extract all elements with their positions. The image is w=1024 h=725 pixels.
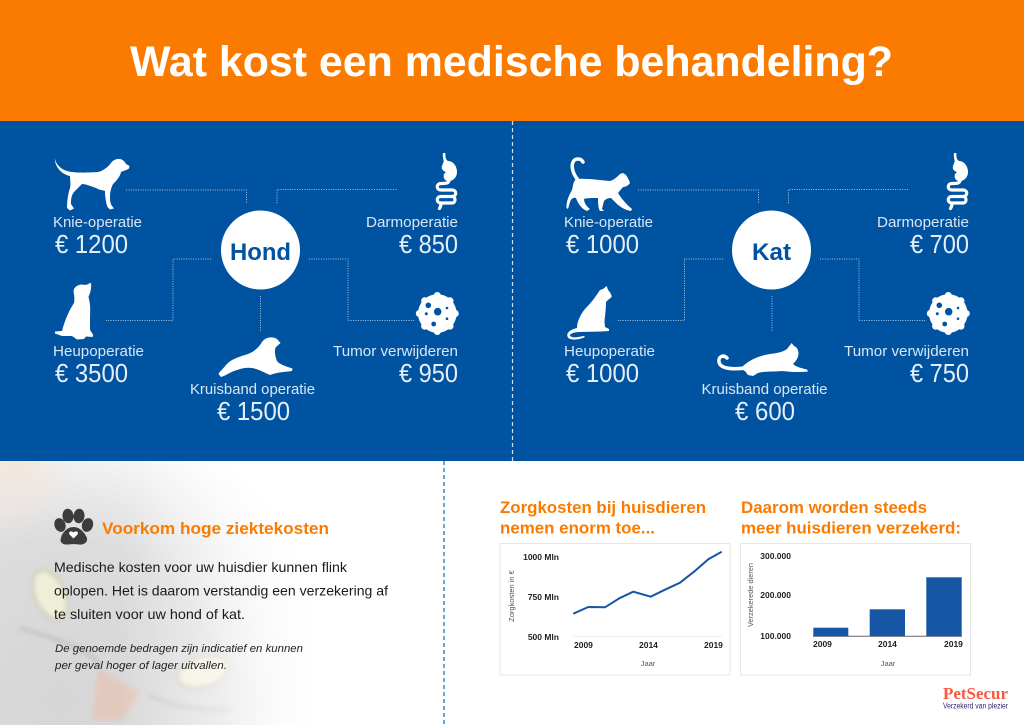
icon: lying dog	[218, 337, 292, 377]
hub: kat: Kat	[752, 239, 791, 266]
body text: oplopen. Het is daarom verstandig een verzekering af	[54, 582, 388, 598]
item: knie-operatie: € 1200	[55, 229, 128, 259]
heading	[741, 498, 961, 538]
icon: intestines	[437, 153, 457, 208]
heading: nemen enorm toe...	[500, 518, 655, 538]
heading: Daarom worden steeds	[741, 498, 927, 517]
background photo: cat face	[0, 461, 256, 725]
heading: Zorgkosten bij huisdieren	[500, 498, 706, 517]
item: kat heupoperatie: € 1000	[566, 358, 639, 388]
logo: PetSecur: Verzekerd van plezier	[943, 702, 1008, 710]
item: kat darmoperatie: € 700	[910, 229, 969, 259]
icon: tumor cell	[927, 292, 970, 335]
item: kat heupoperatie	[564, 343, 655, 388]
bar chart	[740, 544, 970, 675]
item: kat knie-operatie	[564, 214, 653, 259]
line chart: 1000 Mln	[523, 552, 559, 562]
disclaimer	[54, 643, 303, 672]
bar chart: 2009	[813, 639, 832, 649]
connector lines hond	[106, 190, 415, 331]
item: darmoperatie	[366, 214, 458, 259]
item: kat kruisband operatie	[702, 381, 828, 426]
item: kruisband operatie	[190, 381, 315, 426]
line chart: Zorgkosten in €	[507, 569, 516, 622]
icon: standing dog	[55, 158, 130, 210]
logo: PetSecur: PetSecur	[943, 684, 1008, 703]
item: kruisband operatie: € 1500	[217, 396, 290, 426]
disclaimer: De genoemde bedragen zijn indicatief en kunnen	[55, 643, 303, 655]
bar chart: 100.000	[760, 631, 791, 641]
item: kat tumor verwijderen: Tumor verwijderen	[844, 343, 969, 360]
line chart: 750 Mln	[528, 592, 559, 602]
line chart: 500 Mln	[528, 632, 559, 642]
item: kat tumor verwijderen	[844, 343, 969, 388]
line chart: 2014	[639, 640, 658, 650]
item: kat darmoperatie	[877, 214, 969, 259]
hub: hond	[221, 210, 300, 290]
panel: hond	[53, 153, 459, 426]
disclaimer: per geval hoger of lager uitvallen.	[54, 660, 227, 672]
icon: paw	[52, 508, 95, 545]
item: darmoperatie: € 850	[399, 229, 458, 259]
logo: PetSecur	[943, 684, 1008, 710]
item: darmoperatie: Darmoperatie	[366, 214, 458, 231]
item: heupoperatie: Heupoperatie	[53, 343, 144, 360]
item: tumor verwijderen: € 950	[399, 358, 458, 388]
item: heupoperatie: € 3500	[55, 358, 128, 388]
item: knie-operatie	[53, 214, 142, 259]
bar chart: 200.000	[760, 590, 791, 600]
connector lines kat	[617, 190, 926, 331]
item: heupoperatie	[53, 343, 144, 388]
title: Wat kost een medische behandeling?	[130, 38, 893, 86]
bar chart: 2019	[944, 639, 963, 649]
heading: meer huisdieren verzekerd:	[741, 518, 961, 538]
blue cost panel	[0, 121, 1024, 461]
line chart: 2009	[574, 640, 593, 650]
panel: care costs chart	[500, 498, 730, 675]
item: kat knie-operatie: € 1000	[566, 229, 639, 259]
item: kat heupoperatie: Heupoperatie	[564, 343, 655, 360]
icon: lying cat	[719, 343, 808, 376]
item: kat kruisband operatie: Kruisband operatie	[702, 381, 828, 398]
body text: Medische kosten voor uw huisdier kunnen flink	[54, 559, 348, 575]
item: tumor verwijderen	[333, 343, 458, 388]
line chart	[500, 544, 730, 675]
bar chart: Jaar	[881, 659, 896, 668]
panel: kat	[564, 153, 970, 426]
item: kat tumor verwijderen: € 750	[910, 358, 969, 388]
body text: te sluiten voor uw hond of kat.	[54, 606, 245, 622]
icon: walking cat	[566, 159, 632, 211]
icon: intestines	[948, 153, 968, 208]
panel: insured pets chart	[740, 498, 970, 675]
icon: tumor cell	[416, 292, 459, 335]
icon: sitting cat	[567, 286, 612, 340]
hub: hond: Hond	[230, 239, 291, 266]
line chart: Jaar	[641, 659, 656, 668]
bar chart: 300.000	[760, 551, 791, 561]
item: kruisband operatie: Kruisband operatie	[190, 381, 315, 398]
item: knie-operatie: Knie-operatie	[53, 214, 142, 231]
panel: advice	[52, 508, 388, 672]
body text	[54, 559, 388, 622]
bar chart: 2014	[878, 639, 897, 649]
line chart: 2019	[704, 640, 723, 650]
hub: kat	[732, 210, 811, 290]
icon: sitting dog	[55, 283, 93, 340]
item: kat knie-operatie: Knie-operatie	[564, 214, 653, 231]
item: kat darmoperatie: Darmoperatie	[877, 214, 969, 231]
item: tumor verwijderen: Tumor verwijderen	[333, 343, 458, 360]
bar chart: Verzekerede dieren	[746, 563, 755, 627]
heading: Voorkom hoge ziektekosten	[102, 519, 329, 538]
item: kat kruisband operatie: € 600	[735, 396, 795, 426]
heading	[500, 498, 706, 538]
header banner	[0, 0, 1024, 121]
